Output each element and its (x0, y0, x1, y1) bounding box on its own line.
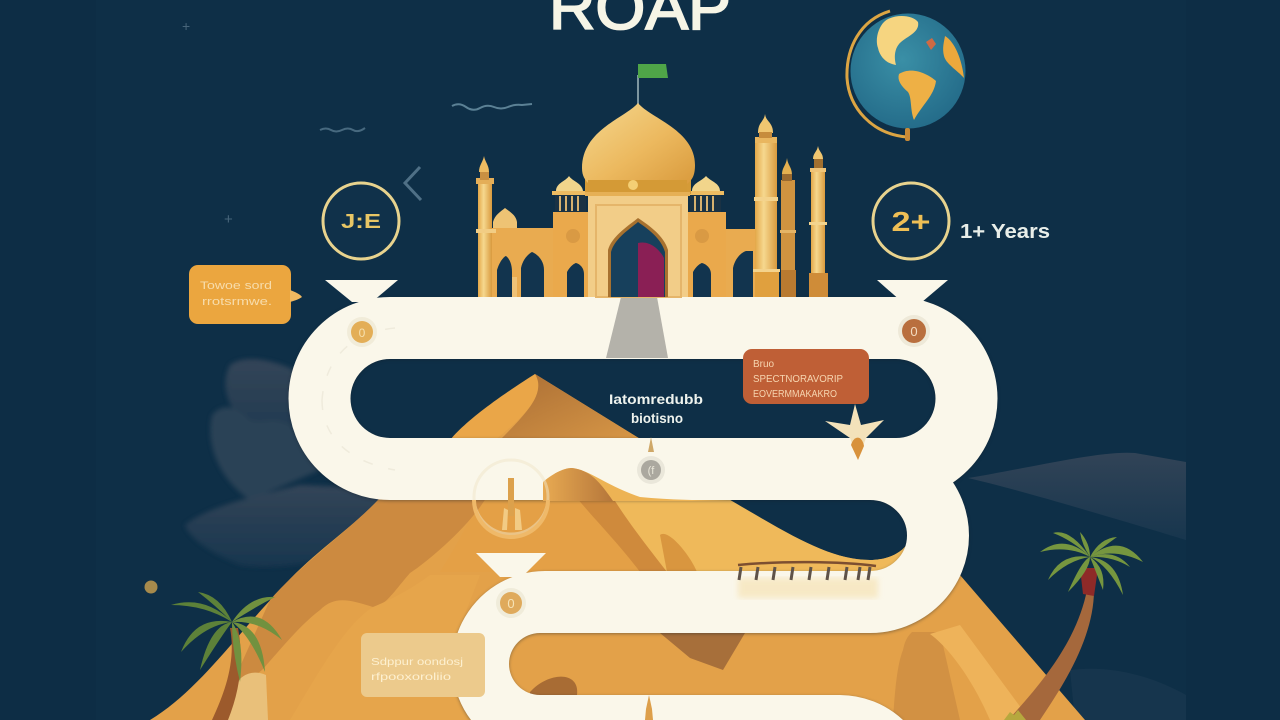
squiggle upper (452, 104, 532, 110)
icon: circle pin on road (474, 460, 548, 537)
badge: left circle: J:E (341, 211, 381, 233)
callout: orange: rrotsrmwe. (202, 296, 272, 308)
callout: terracotta (743, 349, 869, 404)
desert dunes (150, 374, 1085, 720)
palm tree right (1008, 532, 1143, 720)
marker: lower (496, 588, 526, 618)
text: center label (609, 391, 703, 426)
road lane markings (322, 328, 395, 470)
marker: center grey: (f (648, 465, 655, 477)
side wings (553, 212, 726, 297)
far right minaret (809, 146, 828, 297)
grass tuft (1004, 710, 1026, 720)
road junction triangles (325, 280, 948, 577)
icon: sparkle left middle: + (224, 211, 233, 228)
badge: right circle: 2+ (892, 206, 930, 237)
kiosks (552, 176, 724, 212)
squiggle lower (320, 128, 365, 132)
marker: top right: 0 (910, 324, 918, 339)
marker: top right (898, 315, 930, 347)
text: center label: Iatomredubb (609, 391, 703, 407)
far wings (488, 228, 758, 297)
icon: chevron (405, 167, 421, 200)
icon: ladder on road (738, 562, 878, 598)
small planet (144, 580, 158, 594)
middle right minaret (780, 158, 796, 297)
dome (582, 103, 695, 196)
mosque (476, 64, 828, 297)
central portal (588, 196, 688, 297)
callout: pale sand: rfpooxoroliio (371, 671, 451, 683)
marker: top left: 0 (359, 326, 366, 340)
callout: orange (189, 265, 302, 324)
icon: star pin (825, 404, 884, 460)
tall right minaret (753, 114, 780, 297)
icon: globe (847, 11, 966, 141)
callout: terracotta: Bruo (753, 359, 775, 370)
callout: pale sand (361, 633, 485, 697)
left minaret (476, 156, 496, 297)
callout: terracotta: EOVERMMAKAKRO (753, 389, 837, 400)
marker: center grey (637, 437, 665, 484)
callout: pale sand: Sdppur oondosj (371, 656, 463, 668)
marker: top left (347, 317, 377, 347)
text: center label: biotisno (631, 410, 683, 426)
callout: orange: Towoe sord (200, 280, 272, 292)
winding road (320, 328, 966, 720)
marker: lower: 0 (507, 596, 515, 611)
grey road segment (606, 297, 668, 358)
flag (637, 64, 668, 105)
dune peak over road (543, 468, 727, 501)
palm tree left (171, 592, 282, 720)
badge: right circle (873, 183, 949, 259)
small dome left (493, 208, 517, 228)
callout: terracotta: SPECTNORAVORIP (753, 374, 843, 385)
clouds left (185, 359, 420, 567)
icon: sparkle left upper: + (182, 18, 190, 34)
marker: bottom (645, 695, 653, 720)
clouds right (968, 453, 1186, 720)
label: years: 1+ Years (960, 221, 1050, 243)
badge: left circle (323, 183, 399, 259)
